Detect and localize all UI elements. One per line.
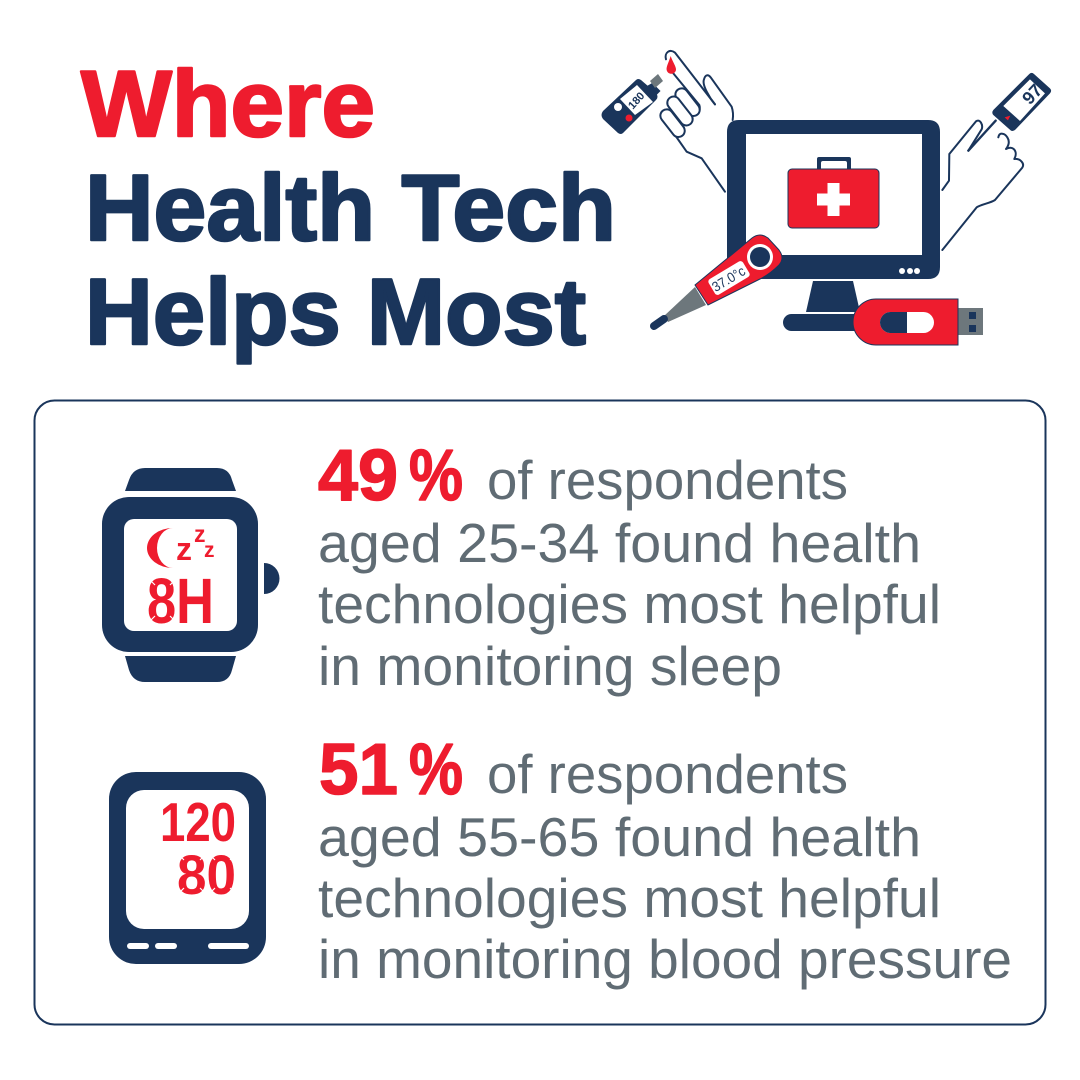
icon: smartwatch showing sleep: [102, 468, 280, 682]
text: blood pressure statistic: aged 55-65 found health: [318, 806, 921, 868]
monitor stand: [806, 281, 860, 312]
text: blood pressure statistic: 51: [319, 730, 398, 810]
icon: USB device: [853, 299, 983, 345]
text: blood pressure statistic: of respondents: [487, 743, 848, 805]
icon: left hand with blood drop: [658, 51, 733, 192]
text: sleep statistic: 49: [318, 436, 398, 516]
icon: thermometer: 37.0°c: [709, 263, 748, 295]
text: sleep statistic: technologies most helpful: [318, 573, 941, 635]
title: Health Tech: [85, 155, 616, 260]
icon: monitor with medical case: [727, 120, 940, 331]
title: [81, 51, 616, 364]
icon: right hand with pulse oximeter: [942, 73, 1051, 250]
text: blood pressure statistic: [318, 730, 1012, 990]
icon: blood pressure monitor: 80: [177, 843, 236, 906]
text: blood pressure statistic: %: [409, 730, 463, 810]
icon: smartwatch showing sleep: z: [194, 521, 206, 547]
icon: thermometer: [654, 235, 782, 326]
title: Where: [81, 51, 375, 156]
text: blood pressure statistic: in monitoring blood pressure: [318, 928, 1012, 990]
text: sleep statistic: in monitoring sleep: [318, 635, 782, 697]
icon: right hand with pulse oximeter: 97: [1018, 80, 1046, 108]
icon: smartwatch showing sleep: 8H: [147, 565, 214, 637]
icon: blood pressure monitor: [109, 772, 266, 964]
icon: smartwatch showing sleep: z: [204, 539, 214, 562]
text: sleep statistic: of respondents: [487, 449, 848, 511]
text: sleep statistic: aged 25-34 found health: [318, 512, 921, 574]
panel: statistics: [34, 400, 1046, 1024]
icon: glucose meter: [602, 74, 663, 134]
icon: blood pressure monitor: 120: [160, 791, 236, 853]
text: sleep statistic: %: [409, 436, 463, 516]
medical case: [817, 157, 851, 171]
icon: smartwatch showing sleep: z: [176, 531, 192, 567]
title: Helps Most: [85, 259, 586, 364]
text: sleep statistic: [318, 436, 941, 697]
icon: glucose meter: 180: [626, 90, 647, 112]
text: blood pressure statistic: technologies most helpful: [318, 867, 941, 929]
monitor frame: [727, 120, 940, 279]
